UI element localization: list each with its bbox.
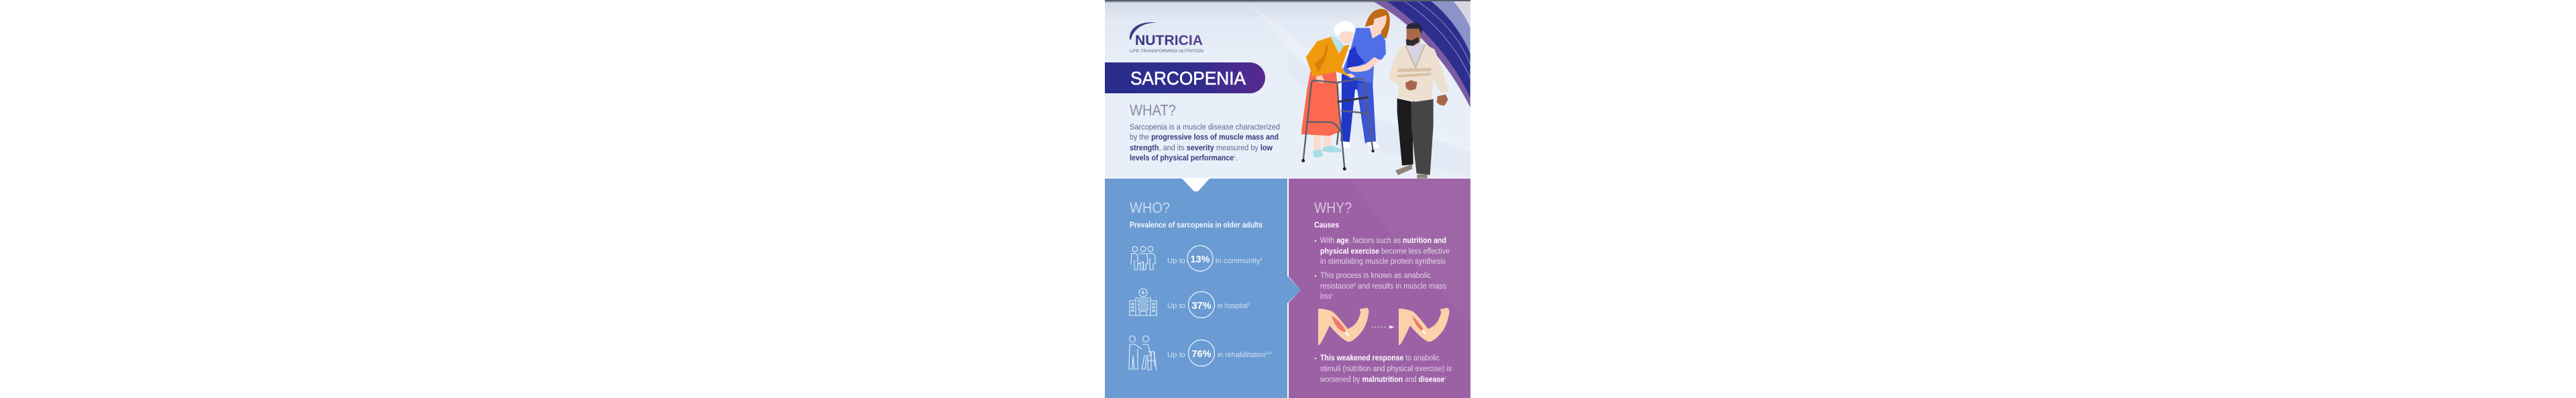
icon: arm muscle loss — [1318, 307, 1450, 345]
icon: hospital — [1129, 289, 1157, 315]
illustration: three people with walker — [1301, 9, 1448, 179]
panel: what — [1105, 0, 1470, 178]
title banner: SARCOPENIA — [1130, 68, 1246, 89]
bullet list: bottom: 1 — [1444, 377, 1447, 381]
icon: carer and patient with walker — [1129, 336, 1157, 370]
row: community — [1167, 246, 1263, 271]
row: community: in community — [1216, 257, 1259, 265]
swoosh — [1373, 1, 1470, 107]
arm with reduced muscle — [1399, 307, 1450, 345]
text: definition: 1 — [1234, 155, 1236, 159]
bullet list: bottom: worsened by malnutrition and disease — [1320, 375, 1448, 384]
row: hospital: Up to — [1167, 302, 1185, 310]
row: hospital: in hospital — [1218, 302, 1251, 310]
logo: LIFE-TRANSFORMING NUTRITION — [1130, 49, 1203, 54]
text: definition: by the progressive loss of muscle mass and — [1130, 132, 1279, 142]
row: hospital: 3 — [1248, 303, 1250, 307]
bullet list: top: 6 — [1354, 283, 1356, 287]
heading: who: WHO? — [1130, 199, 1170, 216]
bullet list: top: in stimulating muscle protein synthesis — [1320, 256, 1446, 266]
bullet list: top: resistance — [1320, 281, 1358, 291]
row: community: Up to — [1167, 257, 1185, 265]
bullet list: bottom: This weakened response to anabolic — [1320, 353, 1440, 362]
title banner — [1105, 62, 1265, 93]
bullet list: top: physical exercise become less effective — [1320, 246, 1450, 256]
text: definition: . — [1236, 153, 1238, 162]
row: hospital: 37% — [1191, 301, 1212, 311]
row: rehabilitation: 76% — [1191, 349, 1212, 360]
bullet list: top: and results in muscle mass — [1356, 281, 1446, 291]
subheading: prevalence: Prevalence of sarcopenia in older adults — [1130, 220, 1263, 230]
walker — [1302, 79, 1374, 170]
row: rehabilitation: 4,5 — [1266, 352, 1272, 356]
text: definition: strength, and its severity measured by low — [1130, 143, 1273, 152]
row: rehabilitation: Up to — [1167, 351, 1185, 359]
text: definition: Sarcopenia is a muscle disease characterized — [1130, 122, 1280, 132]
row: rehabilitation — [1167, 340, 1272, 366]
panel: who — [1105, 179, 1301, 398]
logo: NUTRICIA — [1135, 33, 1203, 48]
nurse — [1340, 9, 1390, 148]
row: community: 2 — [1260, 258, 1263, 262]
man — [1389, 23, 1448, 179]
bullet list: bottom — [1315, 353, 1452, 384]
heading: why: WHY? — [1314, 199, 1352, 216]
bullet list: top: With age, factors such as nutrition and — [1320, 236, 1446, 245]
bullet list: top: loss — [1320, 291, 1335, 301]
icon: community group — [1131, 246, 1155, 270]
text: definition — [1130, 122, 1280, 162]
heading: what: WHAT? — [1130, 101, 1176, 119]
elderly woman — [1301, 21, 1356, 158]
panel: why — [1289, 179, 1470, 398]
logo — [1130, 22, 1203, 54]
row: hospital — [1167, 291, 1250, 318]
row: rehabilitation: in rehabilitation — [1218, 351, 1267, 359]
bullet list: top — [1315, 236, 1450, 301]
text: definition: levels of physical performance — [1130, 153, 1234, 162]
arrow — [1372, 326, 1395, 329]
row: community: 13% — [1190, 254, 1210, 265]
subheading: causes: Causes — [1314, 220, 1339, 230]
arm with normal muscle — [1318, 307, 1369, 345]
bullet list: top: 1 — [1331, 293, 1333, 297]
bullet list: bottom: stimuli (nutrition and physical exercise) is — [1320, 364, 1452, 373]
bullet list: top: This process is known as anabolic — [1320, 270, 1431, 280]
